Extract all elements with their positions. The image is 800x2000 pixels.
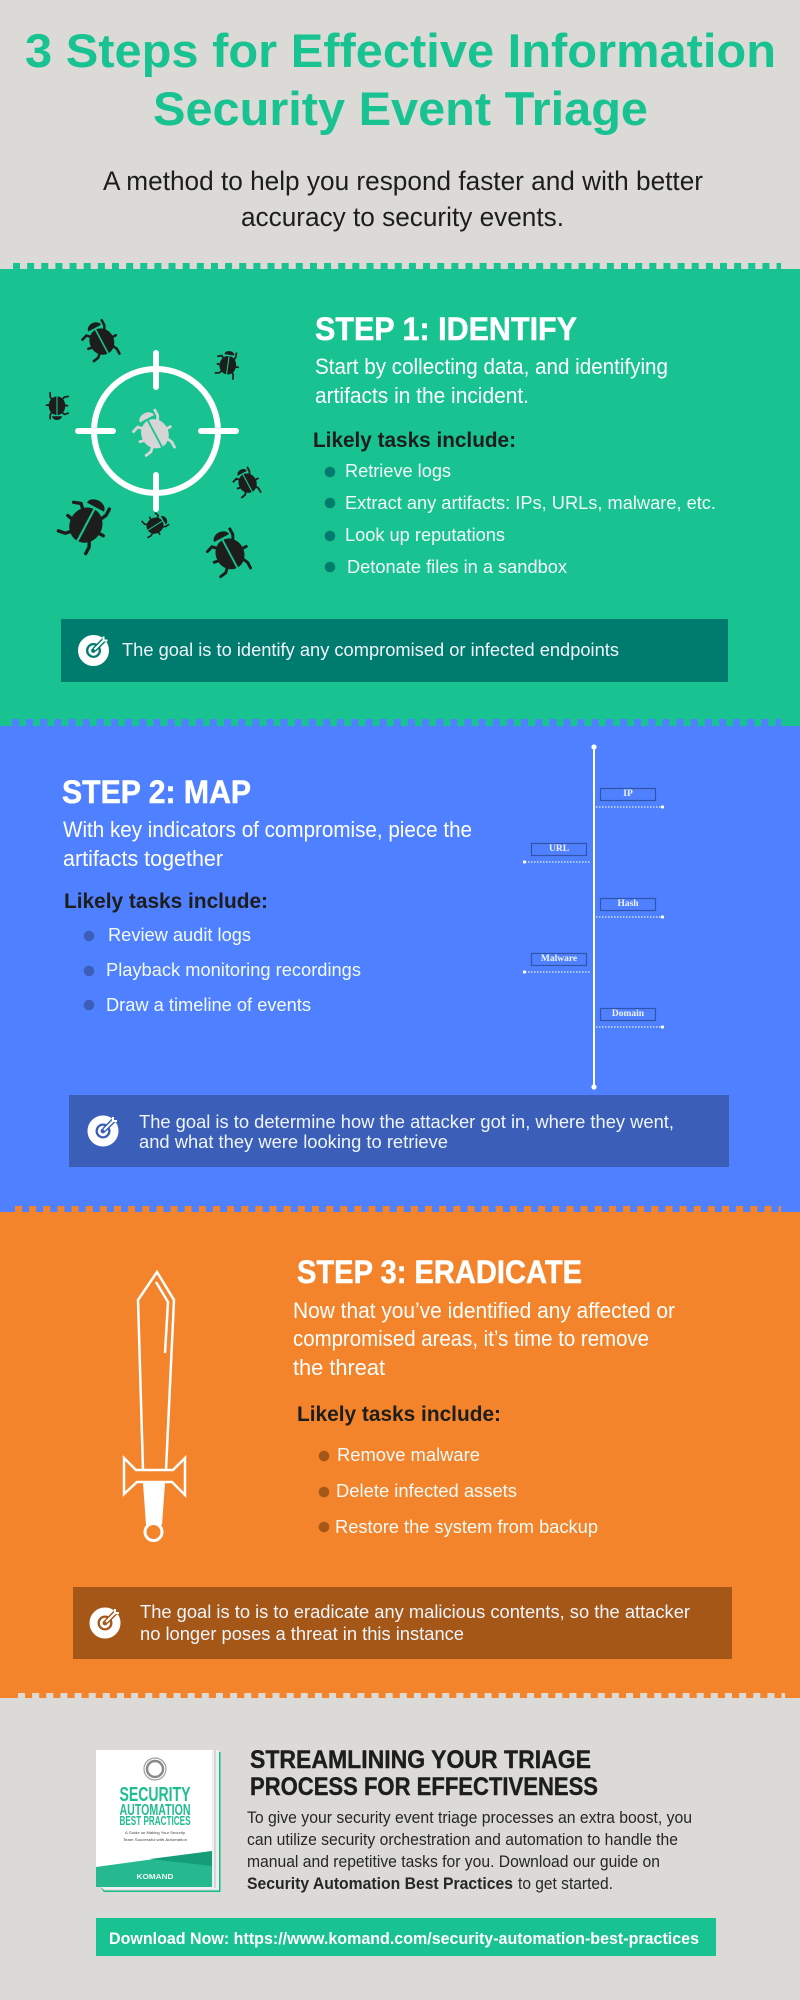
title: Security Event Triage	[153, 82, 648, 135]
label: likely tasks: Likely tasks include:	[64, 890, 268, 913]
callout: step 1 goal: The goal is to identify any compromised or infected endpoints	[122, 639, 619, 660]
task list: step 2: Playback monitoring recordings	[106, 959, 361, 980]
chart: artifact timeline: URL	[549, 844, 569, 854]
subtitle: A method to help you respond faster and with better	[103, 166, 703, 196]
description: step 1	[315, 354, 668, 408]
heading: streamlining: PROCESS FOR EFFECTIVENESS	[250, 1773, 598, 1801]
task list: step 1: Retrieve logs	[345, 460, 451, 481]
icon: guide book cover: SECURITY	[120, 1784, 191, 1806]
task list: step 2: Draw a timeline of events	[106, 994, 311, 1015]
body text: streamlining: manual and repetitive tasks for you. Download our guide on	[247, 1853, 660, 1871]
task list: step 3: Delete infected assets	[336, 1480, 517, 1501]
chart: artifact timeline: Malware	[541, 954, 577, 964]
heading: step 2: STEP 2: MAP	[62, 774, 251, 810]
chart: artifact timeline	[523, 744, 664, 1090]
description: step 2: artifacts together	[63, 846, 223, 871]
icon: guide book cover: AUTOMATION	[120, 1802, 190, 1819]
body text: streamlining: Security Automation Best Practices	[247, 1875, 513, 1893]
callout: step 2 goal	[69, 1095, 729, 1167]
icon: sword	[124, 1272, 185, 1540]
description: step 1: artifacts in the incident.	[315, 383, 529, 408]
task list: step 2: Review audit logs	[108, 924, 251, 945]
task list: step 3	[319, 1444, 598, 1537]
label: likely tasks: Likely tasks include:	[297, 1403, 501, 1426]
heading: streamlining: STREAMLINING YOUR TRIAGE	[250, 1746, 591, 1774]
task list: step 1: Look up reputations	[345, 524, 505, 545]
panel: streamlining footer	[18, 1696, 785, 1956]
icon: guide book cover: Team Successful with Automation	[123, 1837, 187, 1842]
chart: artifact timeline: Hash	[617, 899, 639, 909]
icon: guide book cover: KOMAND	[136, 1874, 174, 1881]
callout: step 2 goal: and what they were looking to retrieve	[139, 1131, 448, 1152]
chart: artifact timeline: Domain	[612, 1009, 645, 1019]
subtitle	[103, 166, 703, 232]
description: step 3: Now that you’ve identified any affected or	[293, 1298, 675, 1323]
heading: step 1: STEP 1: IDENTIFY	[315, 311, 577, 347]
icon: guide book cover	[96, 1750, 220, 1892]
body text: streamlining: can utilize security orchestration and automation to handle the	[247, 1831, 678, 1849]
title	[25, 24, 776, 135]
title: 3 Steps for Effective Information	[25, 24, 776, 77]
description: step 3: the threat	[293, 1355, 385, 1380]
panel: step 3 eradicate	[0, 1209, 800, 1698]
task list: step 1: Extract any artifacts: IPs, URLs, malware, etc.	[345, 492, 716, 513]
description: step 3: compromised areas, it’s time to remove	[293, 1326, 649, 1351]
body text: streamlining: to get started.	[518, 1875, 613, 1893]
task list: step 3: Remove malware	[337, 1444, 480, 1465]
heading: streamlining	[250, 1746, 598, 1801]
description: step 2	[63, 817, 472, 871]
heading: step 3: STEP 3: ERADICATE	[297, 1254, 582, 1290]
subtitle: accuracy to security events.	[241, 202, 564, 232]
icon: guide book cover: A Guide on Making Your Security	[125, 1830, 185, 1835]
body text: streamlining: To give your security event triage processes an extra boost, you	[247, 1809, 692, 1827]
icon: guide book cover: BEST PRACTICES	[120, 1813, 191, 1828]
task list: step 3: Restore the system from backup	[335, 1516, 598, 1537]
icon: crosshair with bugs	[46, 316, 264, 582]
download button: Download Now: https://www.komand.com/security-automation-best-practices	[109, 1929, 699, 1948]
description: step 3	[293, 1298, 675, 1380]
description: step 1: Start by collecting data, and identifying	[315, 354, 668, 379]
callout: step 2 goal: The goal is to determine how the attacker got in, where they went,	[139, 1111, 674, 1132]
panel: step 2 map	[0, 722, 800, 1212]
callout: step 3 goal: The goal is to is to eradicate any malicious contents, so the attacker	[140, 1601, 690, 1622]
chart: artifact timeline: IP	[623, 789, 633, 799]
callout: step 1 goal	[61, 619, 728, 682]
callout: step 3 goal	[73, 1587, 732, 1659]
download button	[96, 1918, 716, 1956]
task list: step 1	[325, 460, 716, 577]
task list: step 1: Detonate files in a sandbox	[347, 556, 568, 577]
body text: streamlining	[247, 1809, 692, 1893]
callout: step 3 goal: no longer poses a threat in this instance	[140, 1623, 464, 1644]
description: step 2: With key indicators of compromise, piece the	[63, 817, 472, 842]
task list: step 2	[84, 924, 361, 1015]
label: likely tasks: Likely tasks include:	[313, 429, 516, 452]
panel: step 1 identify	[0, 266, 800, 726]
